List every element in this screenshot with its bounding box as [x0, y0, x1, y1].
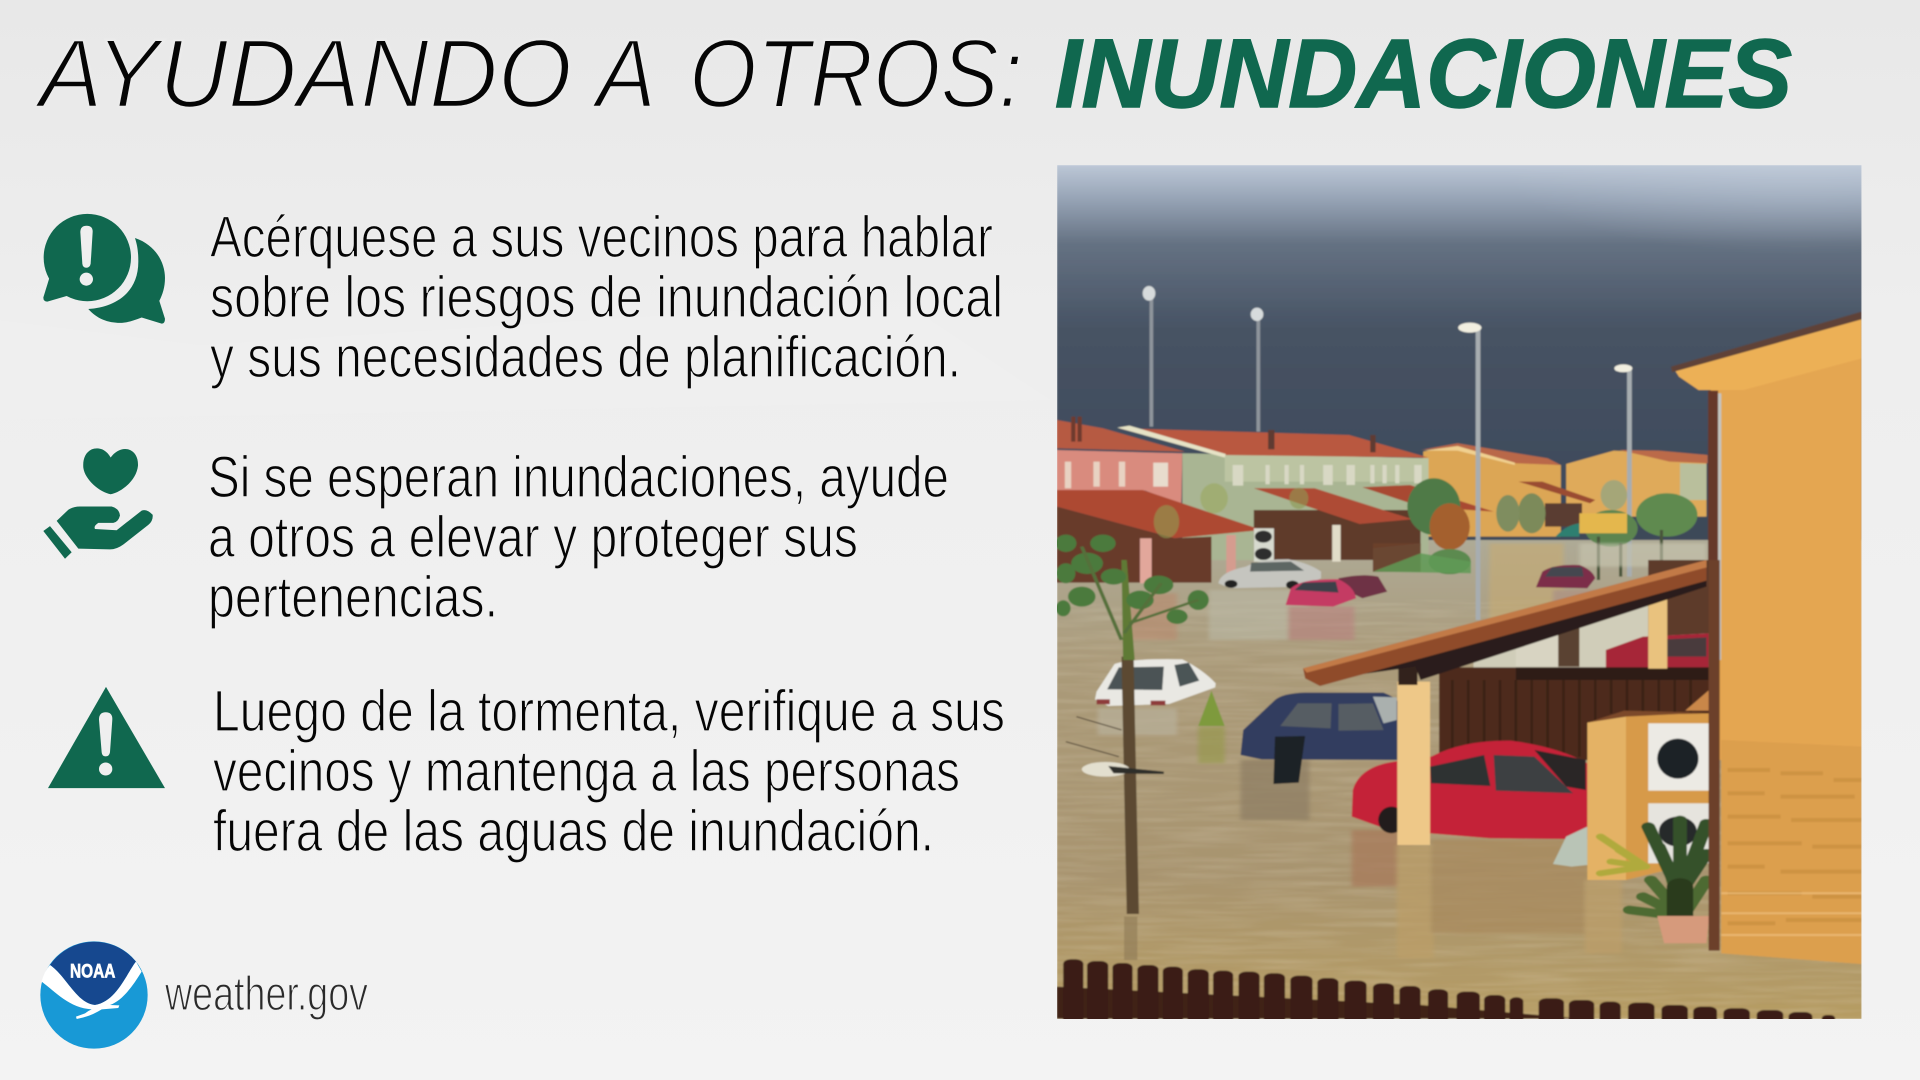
utility wall — [1587, 690, 1709, 880]
text block: help others: a otros a elevar y proteger sus — [208, 505, 858, 570]
white flooded car — [1095, 659, 1216, 735]
carport roof — [1303, 560, 1706, 686]
wooden fence — [1057, 958, 1836, 1019]
sky — [1057, 165, 1862, 565]
text block: neighbours: Acérquese a sus vecinos para hablar — [210, 205, 993, 270]
icon: hand holding heart — [43, 448, 153, 559]
potted palm — [1601, 820, 1709, 943]
text block: after the storm — [213, 679, 1005, 864]
foreground tree leaves — [1055, 535, 1209, 640]
text block: neighbours: sobre los riesgos de inundación local — [210, 265, 1003, 330]
weather.gov label: weather.gov — [164, 968, 368, 1021]
carports — [1057, 485, 1494, 583]
NOAA logo: NOAA — [70, 961, 115, 982]
title: AYUDANDO — [34, 19, 572, 128]
title — [34, 19, 1792, 128]
flood water — [1057, 540, 1862, 1019]
reflections near carport — [1198, 727, 1622, 958]
photo: flooded neighbourhood — [1055, 165, 1862, 1080]
foreground — [1057, 560, 1862, 1080]
text block: after the storm: Luego de la tormenta, verifique a sus — [213, 679, 1005, 744]
trees — [1154, 478, 1697, 580]
red car — [1352, 741, 1587, 839]
title: A — [591, 19, 656, 128]
text block: after the storm: fuera de las aguas de inundación. — [213, 799, 934, 864]
NOAA logo — [40, 941, 148, 1049]
text block: neighbours: y sus necesidades de planificación. — [210, 325, 961, 390]
small conifer — [1198, 691, 1225, 726]
right building — [1671, 312, 1862, 760]
air conditioner units — [1648, 723, 1710, 863]
far side beyond carport — [1474, 560, 1709, 670]
young tree in water — [1066, 560, 1164, 960]
text block: help others — [208, 445, 949, 630]
carport pillars — [1397, 599, 1667, 845]
icon: warning triangle — [48, 687, 165, 788]
water reflections — [1129, 543, 1706, 640]
text block: after the storm: vecinos y mantenga a las personas — [213, 739, 960, 804]
distant flooded cars — [1218, 513, 1627, 607]
green house — [1117, 426, 1429, 560]
title: INUNDACIONES — [1055, 19, 1792, 128]
lamp posts — [1143, 286, 1632, 620]
text block: neighbours — [210, 205, 1003, 390]
yellow houses — [1421, 443, 1708, 537]
houses in the background — [1057, 286, 1708, 640]
pink house — [1057, 417, 1185, 505]
text block: help others: Si se esperan inundaciones, ayude — [208, 445, 949, 510]
carport wood wall — [1439, 667, 1709, 760]
blue flooded car — [1241, 693, 1399, 784]
icon: chat bubbles with exclamation — [43, 214, 165, 324]
title: OTROS: — [689, 19, 1023, 128]
text block: help others: pertenencias. — [208, 565, 498, 630]
floating chair — [1553, 827, 1587, 867]
right building wall — [1709, 560, 1862, 964]
